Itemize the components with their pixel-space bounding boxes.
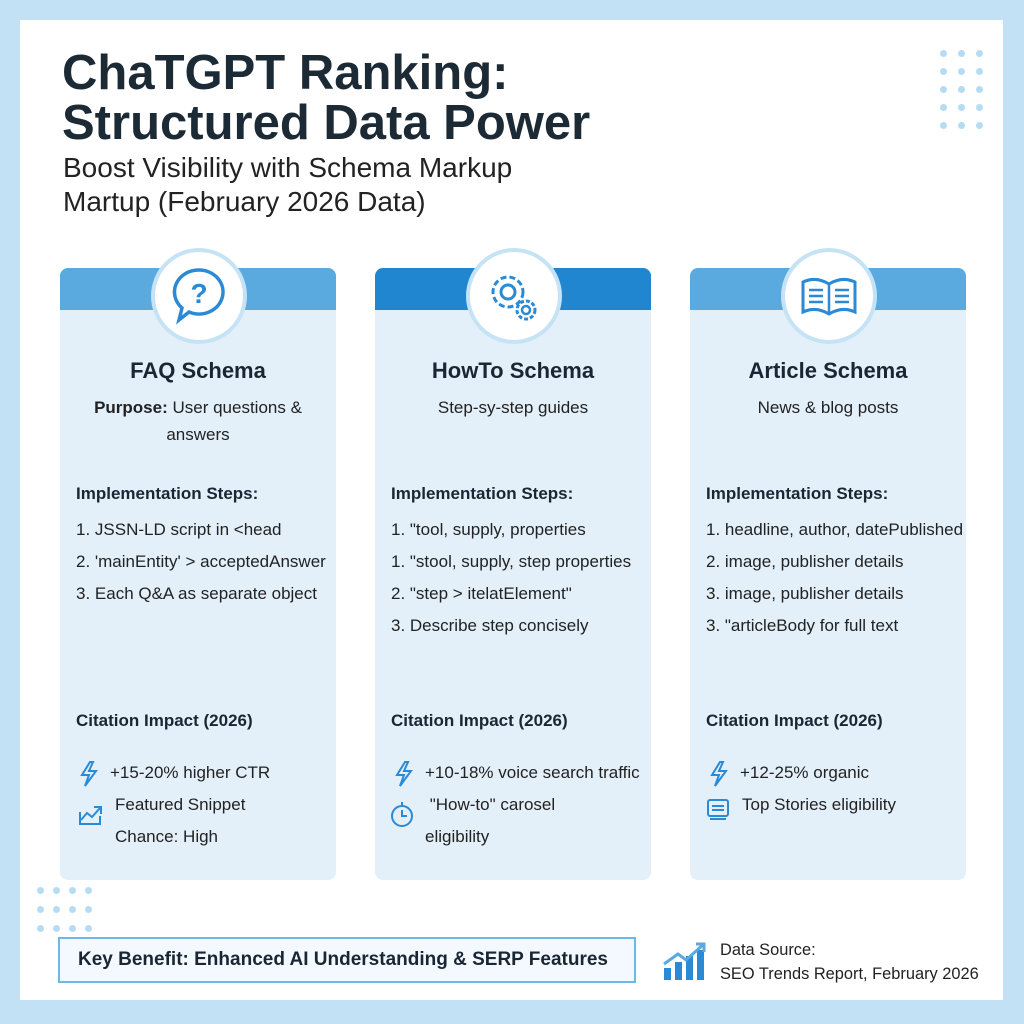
icon: chart (663, 942, 706, 980)
data source: SEO Trends Report, February 2026 (720, 965, 979, 983)
text: 3. Each Q&A as separate object (76, 584, 317, 603)
text: Implementation Steps: (706, 484, 888, 503)
subtitle: Boost Visibility with Schema Markup (63, 152, 512, 183)
text: +12-25% organic (740, 763, 869, 782)
icon: book (781, 248, 877, 344)
text: 3. "articleBody for full text (706, 616, 898, 635)
text: 2. "step > itelatElement" (391, 584, 572, 603)
text: Purpose: User questions & (94, 398, 302, 417)
subtitle (63, 152, 512, 217)
text: FAQ Schema (130, 358, 266, 383)
text: 1. "stool, supply, step properties (391, 552, 631, 571)
dots top right (940, 50, 983, 129)
data source: Data Source: (720, 941, 816, 959)
Article text (706, 358, 963, 820)
HowTo text (391, 358, 640, 846)
callout: key benefit (58, 937, 636, 983)
dots bottom left (37, 887, 92, 932)
text: "How-to" carosel (430, 795, 555, 814)
text: Citation Impact (2026) (76, 711, 253, 730)
panel: HowTo (375, 268, 651, 880)
text: 1. "tool, supply, properties (391, 520, 586, 539)
text: Top Stories eligibility (742, 795, 896, 814)
text: News & blog posts (758, 398, 898, 417)
data source (720, 941, 979, 983)
icon: question bubble (151, 248, 247, 344)
text: Chance: High (115, 827, 218, 846)
text: +10-18% voice search traffic (425, 763, 640, 782)
panel: Article (690, 268, 966, 880)
text: 2. image, publisher details (706, 552, 904, 571)
text: eligibility (425, 827, 489, 846)
subtitle: Martup (February 2026 Data) (63, 186, 426, 217)
text: +15-20% higher CTR (110, 763, 270, 782)
text: 2. 'mainEntity' > acceptedAnswer (76, 552, 326, 571)
text: Featured Snippet (115, 795, 245, 814)
icon: question bubble: ? (190, 278, 208, 309)
text: 3. image, publisher details (706, 584, 904, 603)
text: HowTo Schema (432, 358, 594, 383)
text: Implementation Steps: (391, 484, 573, 503)
text: Article Schema (749, 358, 907, 383)
title: ChaTGPT Ranking: (62, 46, 508, 100)
icon: gears (466, 248, 562, 344)
callout: key benefit: Key Benefit: Enhanced AI Understanding & SERP Features (78, 949, 608, 970)
text: Citation Impact (2026) (391, 711, 568, 730)
text: Step-sy-step guides (438, 398, 588, 417)
title: Structured Data Power (62, 96, 590, 150)
text: 3. Describe step concisely (391, 616, 588, 635)
panel: FAQ (60, 268, 336, 880)
title (62, 46, 590, 150)
FAQ text (76, 358, 326, 846)
text: 1. JSSN-LD script in <head (76, 520, 282, 539)
text: answers (166, 425, 230, 444)
text: 1. headline, author, datePublished (706, 520, 963, 539)
text: Citation Impact (2026) (706, 711, 883, 730)
text: Implementation Steps: (76, 484, 258, 503)
